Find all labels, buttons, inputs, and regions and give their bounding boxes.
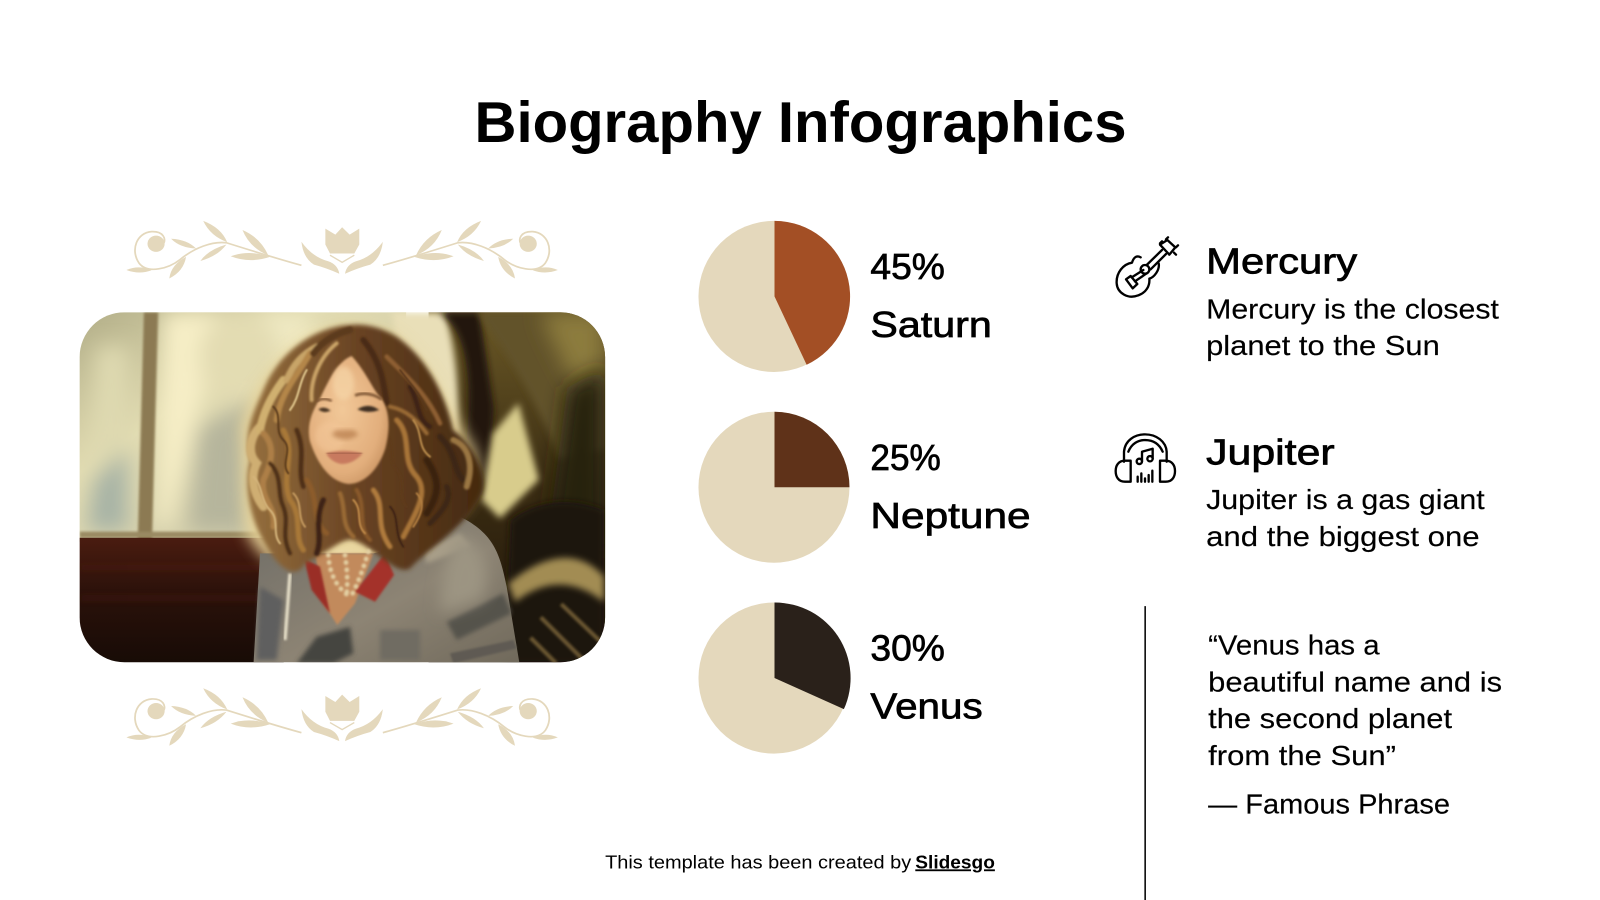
- label: Saturn: 45%: [870, 247, 945, 287]
- icon: guitar: [1117, 237, 1178, 297]
- label: Neptune: Neptune: [870, 496, 1031, 536]
- text block: Mercury: [1206, 241, 1499, 361]
- shirt: [253, 517, 520, 667]
- red scarf: [304, 558, 330, 613]
- window frame: [138, 312, 158, 540]
- icon: headphones with music: [1116, 434, 1175, 482]
- necklace: [328, 552, 368, 598]
- figure: [240, 325, 520, 667]
- text block: Jupiter: [1206, 432, 1485, 552]
- fine curls: [253, 370, 430, 547]
- right background: [429, 312, 612, 664]
- label: Venus: 30%: [870, 629, 945, 669]
- label: Saturn: Saturn: [870, 305, 992, 345]
- label: Venus: [870, 629, 983, 726]
- window background: [80, 312, 406, 542]
- wooden sill: [80, 538, 284, 665]
- text block: Mercury: planet to the Sun: [1206, 330, 1440, 361]
- skin of chest: [315, 553, 373, 625]
- label: Saturn: [870, 247, 992, 345]
- hair highlights: [251, 330, 470, 553]
- label: Neptune: 25%: [870, 438, 941, 478]
- pie chart: Neptune 25%: [698, 412, 849, 563]
- quote: beautiful name and is: [1208, 666, 1502, 697]
- quote: [1208, 630, 1502, 819]
- label: Venus: Venus: [870, 686, 983, 726]
- footer credit: This template has been created by: [605, 851, 912, 872]
- hair mass: [247, 325, 483, 572]
- quote: — Famous Phrase: [1208, 788, 1450, 819]
- text block: Jupiter: Jupiter is a gas giant: [1206, 484, 1485, 515]
- quote: from the Sun”: [1208, 740, 1396, 771]
- nose and lips: [332, 430, 358, 440]
- label: Neptune: [870, 438, 1031, 536]
- quote divider line: [1144, 606, 1146, 900]
- hair glow: [240, 325, 478, 573]
- pie chart: Saturn 45%: [698, 221, 850, 372]
- ornament: top floral divider: [126, 221, 558, 278]
- pie chart: Venus 30%: [698, 603, 851, 754]
- eyes and brows: [316, 399, 332, 402]
- text block: Jupiter: Jupiter: [1206, 432, 1335, 472]
- text block: Mercury: Mercury is the closest: [1206, 293, 1499, 324]
- quote: “Venus has a: [1208, 630, 1380, 661]
- ornament: bottom floral divider: [126, 688, 558, 746]
- face: [309, 356, 389, 484]
- footer credit: Slidesgo: [915, 851, 995, 872]
- title: Biography Infographics: [474, 91, 1127, 155]
- photo: portrait of a young woman by a window: [80, 311, 612, 667]
- text block: Mercury: Mercury: [1206, 241, 1357, 281]
- text block: Jupiter: and the biggest one: [1206, 521, 1480, 552]
- quote: the second planet: [1208, 703, 1452, 734]
